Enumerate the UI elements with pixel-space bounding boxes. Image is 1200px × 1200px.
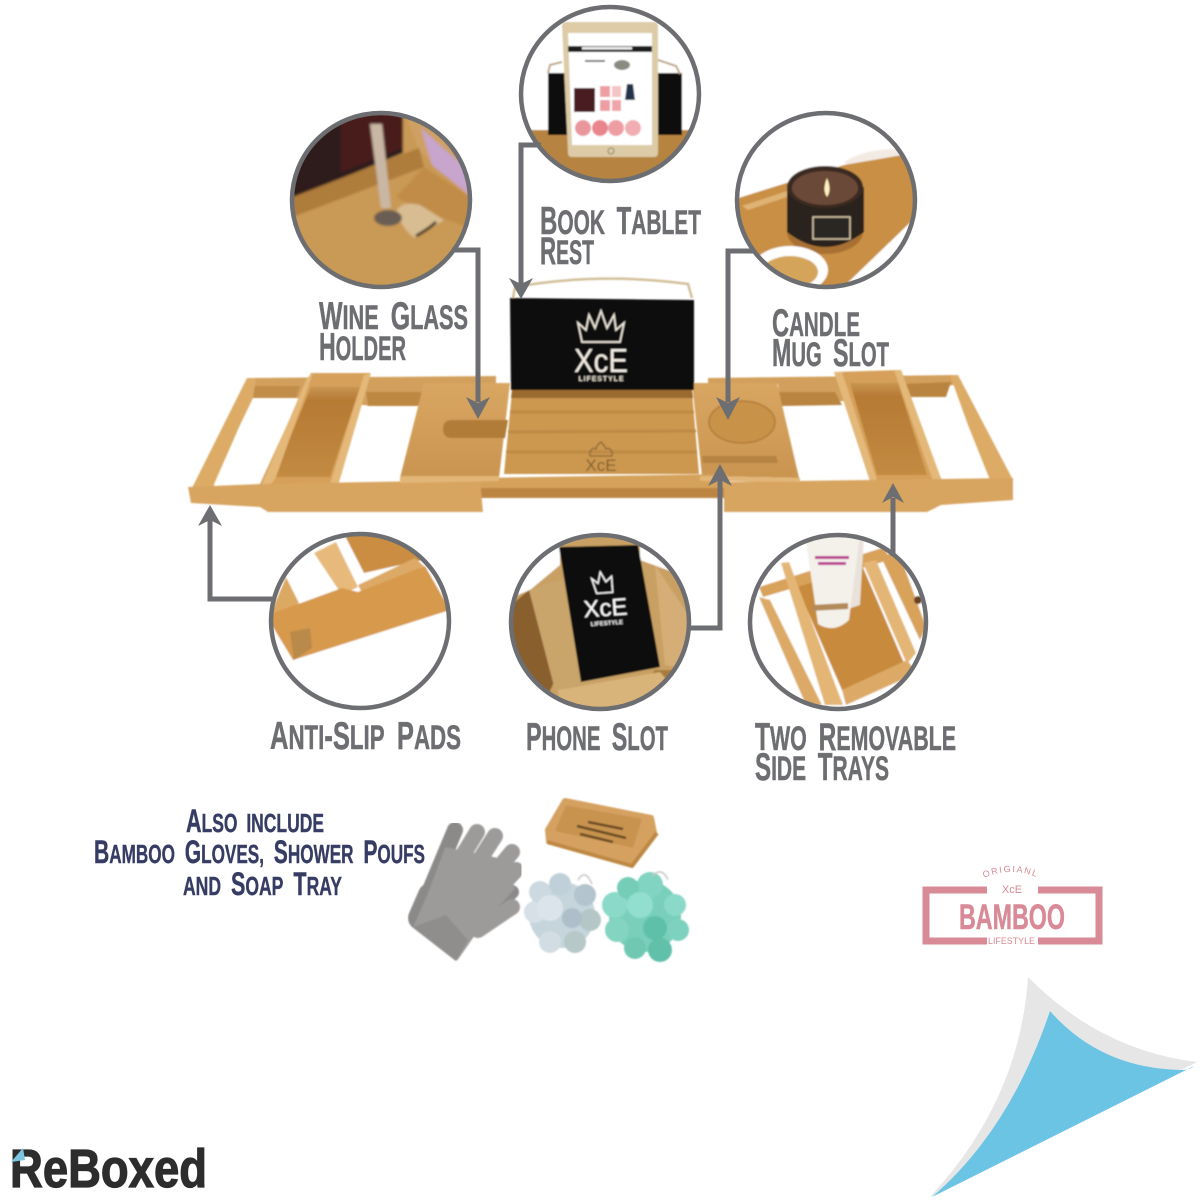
tray: wine glass holder panel bbox=[400, 383, 510, 478]
front glove bbox=[413, 832, 516, 961]
heading: wine glass holder bbox=[319, 295, 468, 369]
circle: candle photo bbox=[734, 110, 918, 290]
circle: anti-slip pads photo bbox=[265, 530, 455, 715]
text block: also include: AND SOAP TRAY bbox=[183, 866, 342, 902]
heading: two removable side trays: SIDE TRAYS bbox=[755, 746, 889, 789]
logo arc text: ORIGIANL bbox=[983, 866, 1036, 877]
heading: phone slot: PHONE SLOT bbox=[526, 716, 668, 759]
arrow: removable side trays bbox=[882, 483, 904, 556]
heading: two removable side trays: TWO REMOVABLE bbox=[755, 716, 956, 759]
icon: bamboo soap tray bbox=[547, 801, 657, 866]
ReBoxed corner fold bbox=[11, 1148, 25, 1162]
arrow: book tablet rest bbox=[509, 145, 541, 299]
icon: blue shower pouf bbox=[524, 873, 601, 953]
tray: centre panel bbox=[504, 390, 699, 475]
back glove bbox=[420, 830, 512, 918]
XcE on phone sleeve: XcE bbox=[583, 594, 628, 624]
circle: tablet on book rest photo bbox=[515, 0, 705, 190]
arrow: anti-slip pads bbox=[198, 505, 272, 599]
tray: front bars bbox=[188, 474, 1013, 512]
engraved XcE logo bbox=[585, 442, 617, 475]
heading: book tablet rest: BOOK TABLET bbox=[540, 200, 701, 243]
tray: back rails bbox=[250, 375, 957, 406]
text block: also include: ALSO INCLUDE bbox=[186, 803, 324, 839]
tray: book rest handle wire bbox=[513, 279, 692, 298]
heading: book tablet rest: REST bbox=[540, 230, 594, 273]
text block: also include bbox=[94, 803, 425, 902]
logo bamboo wordmark: BAMBOO bbox=[959, 898, 1065, 937]
crown mini icon bbox=[591, 571, 613, 594]
heading: book tablet rest bbox=[540, 200, 701, 273]
XcE lettering: XcE bbox=[574, 342, 628, 379]
logo lifestyle: LIFESTYLE bbox=[988, 936, 1035, 946]
text block: also include: BAMBOO GLOVES, SHOWER POUFS bbox=[94, 834, 425, 870]
arrow: wine glass holder bbox=[452, 250, 490, 419]
icon: bamboo gloves bbox=[413, 830, 516, 961]
heading: candle mug slot: CANDLE bbox=[772, 302, 860, 345]
decoration: blue folded corner bbox=[930, 977, 1197, 1197]
logo XcE: XcE bbox=[1002, 884, 1022, 896]
circle: wine glass holder photo bbox=[290, 110, 472, 290]
heading: candle mug slot: MUG SLOT bbox=[772, 332, 889, 375]
tray: black book rest with logo bbox=[510, 298, 694, 390]
heading: wine glass holder: HOLDER bbox=[319, 326, 406, 369]
lifestyle lettering: LIFESTYLE bbox=[578, 376, 624, 383]
tray: left removable side tray bbox=[260, 373, 371, 486]
logo: original XcE bamboo lifestyle bbox=[922, 866, 1102, 946]
heading: two removable side trays bbox=[755, 716, 956, 789]
crown icon bbox=[578, 311, 624, 342]
tray: right outer frame bbox=[950, 375, 1013, 480]
lifestyle small text on phone sleeve: LIFESTYLE bbox=[591, 620, 623, 628]
tray: candle and phone panel bbox=[692, 383, 799, 478]
arrow: candle mug slot bbox=[716, 251, 755, 420]
tray: left outer frame bbox=[191, 378, 256, 490]
logo: ReBoxed: ReBoxed bbox=[10, 1139, 207, 1199]
bamboo bath tray product bbox=[188, 279, 1013, 512]
circle: phone slot photo bbox=[505, 530, 695, 715]
heading: wine glass holder: WINE GLASS bbox=[319, 295, 468, 338]
arrow: phone slot bbox=[690, 464, 732, 628]
tray: right removable side tray bbox=[834, 370, 943, 486]
engraved XcE logo: XcE bbox=[585, 456, 617, 475]
heading: anti-slip pads: ANTI-SLIP PADS bbox=[270, 715, 461, 758]
icon: green shower pouf bbox=[602, 872, 689, 962]
circle: removable side tray photo bbox=[745, 530, 935, 715]
heading: candle mug slot bbox=[772, 302, 889, 375]
